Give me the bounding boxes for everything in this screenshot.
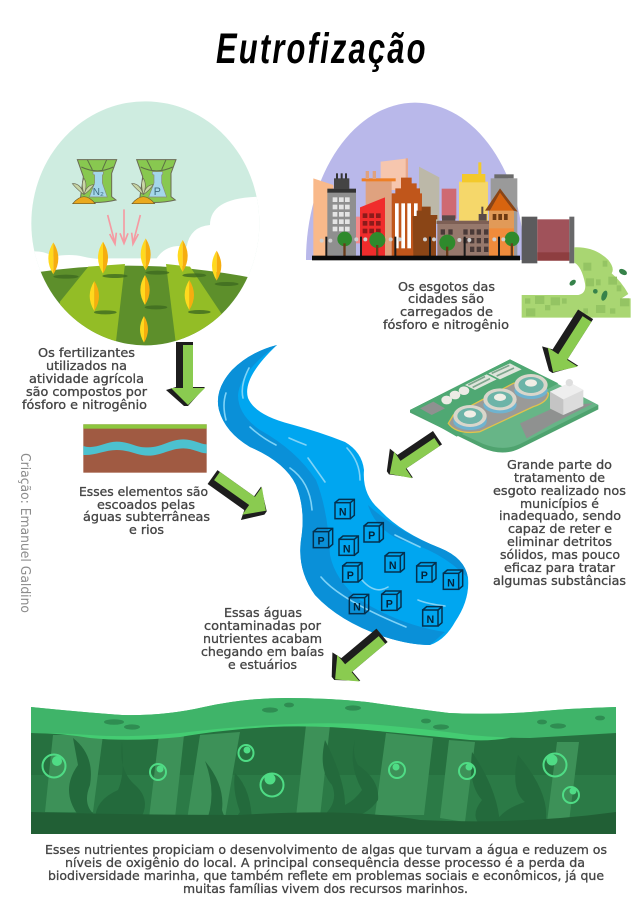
surface algae band	[31, 698, 616, 740]
panel: river	[218, 345, 468, 645]
text: fertilizers	[22, 346, 147, 412]
nutrient cubes: N	[447, 577, 455, 589]
road	[312, 256, 520, 260]
text: city sewage: carregados de	[400, 305, 493, 319]
text: fertilizers: atividade agrícola	[29, 372, 144, 386]
text: sewage treatment: municípios é	[520, 497, 599, 511]
oxygen bubbles	[42, 745, 579, 803]
nutrient cubes: N	[339, 507, 347, 519]
text: sewage treatment: inadequado, sendo	[499, 509, 621, 523]
nutrient cubes: P	[421, 570, 428, 582]
panel: fertilized field illustration	[30, 101, 267, 350]
text: city sewage: fósforo e nitrogênio	[383, 318, 509, 332]
text: city sewage: cidades são	[408, 292, 484, 306]
purple sky dome	[306, 103, 524, 260]
spots	[104, 703, 605, 730]
arrow: field to soil	[166, 342, 205, 406]
nutrient cubes: P	[347, 570, 354, 582]
panel: sewage treatment plant	[410, 359, 598, 452]
text: sewage treatment	[493, 458, 626, 588]
text: consequences: Esses nutrientes propiciam o desenvolvimento de algas que turvam a água e reduzem os	[45, 843, 607, 857]
roads	[420, 402, 593, 438]
icon: pink arrows falling	[108, 209, 140, 244]
text: sewage treatment: algumas substâncias	[493, 574, 626, 588]
nutrient cubes	[313, 499, 463, 626]
nutrient cubes: N	[343, 543, 351, 555]
text: contaminated waters: Essas águas	[224, 606, 302, 620]
text: sewage treatment: sólidos, mas pouco	[500, 548, 620, 562]
arrow: plant to river	[377, 423, 448, 488]
seaweed	[69, 738, 546, 825]
nutrient cubes: P	[386, 598, 393, 610]
text: city sewage: Os esgotos das	[398, 280, 495, 294]
text: contaminated waters: chegando em baías	[201, 645, 324, 659]
settling tank loop	[448, 382, 548, 432]
nutrient cubes: P	[368, 530, 375, 542]
text: sewage treatment: eficaz para tratar	[504, 561, 615, 575]
text: elements drained: e rios	[129, 523, 164, 537]
seed shadows	[53, 271, 239, 314]
panel: city illustration	[306, 103, 631, 318]
text: consequences: muitas famílias vivem dos recursos marinhos.	[183, 882, 468, 896]
text: consequences: níveis de oxigênio do local. A principal consequência desse processo é a perda da	[65, 856, 585, 870]
text: sewage treatment: capaz de reter e	[508, 522, 612, 536]
nutrient cubes: N	[353, 602, 361, 614]
text: sewage treatment: esgoto realizado nos	[493, 484, 626, 498]
credit: Criação: Emanuel Galdino	[17, 453, 32, 613]
text: elements drained: Esses elementos são	[79, 485, 208, 499]
icon: fertilizer bags: N₂	[93, 187, 104, 198]
nutrient cubes: N	[389, 560, 397, 572]
nutrient cubes: N	[426, 614, 434, 626]
panel: soil layers with groundwater	[83, 424, 207, 473]
title: Eutrofização	[216, 24, 428, 72]
text: elements drained	[79, 485, 210, 537]
control building	[550, 379, 583, 415]
text: sewage treatment: eliminar detritos	[507, 535, 612, 549]
text: elements drained: escoados pelas	[97, 498, 195, 512]
text: fertilizers: fósforo e nitrogênio	[22, 398, 147, 412]
text: contaminated waters: contaminadas por	[204, 619, 321, 633]
light rays	[45, 725, 579, 822]
nutrient cubes: P	[317, 536, 325, 548]
field ground	[40, 264, 248, 346]
treatment tanks	[453, 374, 548, 430]
trees and lamps	[320, 232, 519, 256]
text: sewage treatment: tratamento de	[514, 471, 605, 485]
text: consequences: biodiversidade marinha, que também reflete em problemas sociais e econômicos, já que	[48, 869, 604, 883]
text: fertilizers: Os fertilizantes	[38, 346, 135, 360]
river highlights	[224, 368, 445, 627]
icon: fertilizer bags: P	[154, 186, 161, 198]
text: fertilizers: utilizados na	[46, 359, 127, 373]
text: city sewage	[383, 280, 509, 332]
buildings	[313, 158, 518, 256]
text: fertilizers: são compostos por	[26, 385, 147, 399]
arrow: sewage to plant	[533, 304, 604, 383]
text: contaminated waters: e estuários	[228, 658, 297, 672]
text: contaminated waters: nutrientes acabam	[203, 632, 322, 646]
sewage pipe	[522, 217, 574, 263]
clouds	[34, 196, 260, 277]
arrow: soil to river	[202, 460, 277, 529]
icon: fertilizer bags	[72, 160, 176, 204]
panel: algae-covered water	[31, 698, 616, 834]
text: sewage treatment: Grande parte do	[507, 458, 612, 472]
yellow seeds	[48, 238, 221, 343]
arrow: river to sea	[320, 621, 395, 693]
text: contaminated waters	[201, 606, 324, 672]
text: consequences	[45, 843, 607, 896]
text: elements drained: águas subterrâneas	[83, 510, 210, 524]
green sewage flow	[522, 247, 631, 318]
